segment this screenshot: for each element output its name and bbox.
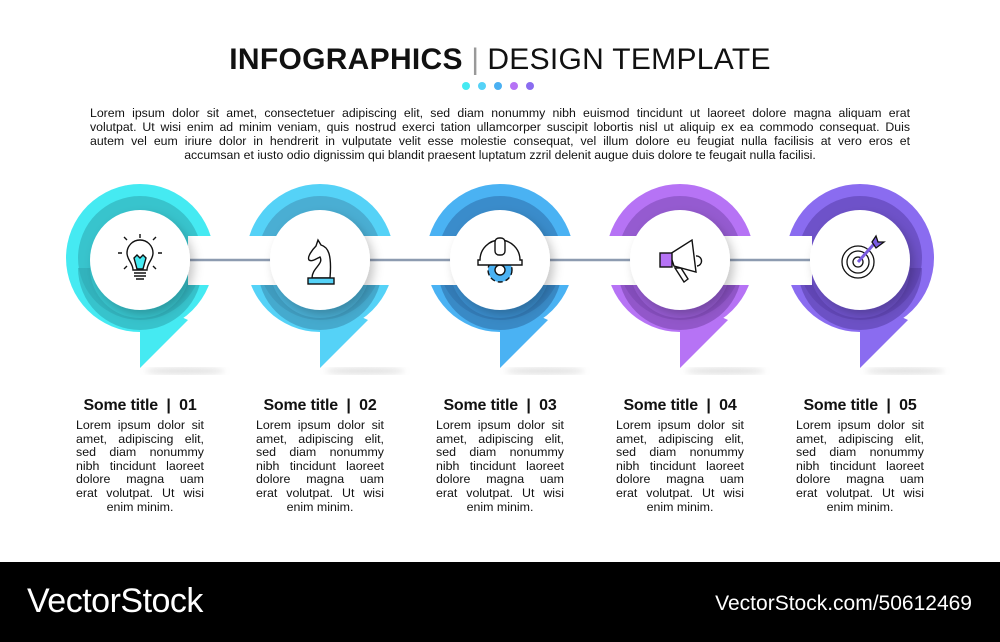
- column 4 text: nibh tincidunt laoreet: [616, 459, 744, 473]
- column 2 text: amet, adipiscing elit,: [256, 432, 384, 446]
- column 4 text: erat volutpat. Ut wisi: [616, 486, 744, 500]
- column 2 text: nibh tincidunt laoreet: [256, 459, 384, 473]
- column 1 text: enim minim.: [107, 500, 173, 514]
- marker 4: [606, 184, 754, 368]
- icon: chess knight: [308, 240, 334, 284]
- column 2 text: enim minim.: [287, 500, 353, 514]
- column 5 text: amet, adipiscing elit,: [796, 432, 924, 446]
- icon: light bulb: [118, 234, 162, 279]
- column 1 text: amet, adipiscing elit,: [76, 432, 204, 446]
- column 3 text: erat volutpat. Ut wisi: [436, 486, 564, 500]
- column 1 text: Some title | 01: [83, 397, 197, 414]
- column 1 text: erat volutpat. Ut wisi: [76, 486, 204, 500]
- white circles: [90, 210, 910, 310]
- title: INFOGRAPHICS | DESIGN TEMPLATE: [229, 43, 771, 76]
- white band: [188, 236, 812, 285]
- column 2 text: Some title | 02: [263, 397, 377, 414]
- column 5 text: Lorem ipsum dolor sit: [796, 418, 924, 432]
- icon: target: [842, 236, 884, 278]
- marker 2: [246, 184, 394, 368]
- column 3 text: sed diam nonummy: [436, 445, 564, 459]
- column 3 text: Lorem ipsum dolor sit: [436, 418, 564, 432]
- marker 1: [66, 184, 214, 368]
- column 3 text: Some title | 03: [443, 397, 557, 414]
- column 1 text: nibh tincidunt laoreet: [76, 459, 204, 473]
- footer bar: [0, 562, 1000, 642]
- tail shadows: [145, 368, 945, 374]
- connector line: [190, 259, 810, 261]
- column 5 text: enim minim.: [827, 500, 893, 514]
- column 4 text: Some title | 04: [623, 397, 737, 414]
- column 4 text: Lorem ipsum dolor sit: [616, 418, 744, 432]
- column 2 text: sed diam nonummy: [256, 445, 384, 459]
- markers diagram: [66, 184, 942, 375]
- intro text: Lorem ipsum dolor sit amet, consectetuer adipiscing elit, sed diam nonummy nibh euismod tincidunt ut laoreet dolore magna aliquam erat: [90, 106, 910, 120]
- column 5 text: dolore magna uam: [796, 472, 924, 486]
- icon: helmet gear: [478, 238, 522, 282]
- column 5 text: sed diam nonummy: [796, 445, 924, 459]
- column 4 text: sed diam nonummy: [616, 445, 744, 459]
- column 2 text: [256, 397, 384, 514]
- column 5 text: Some title | 05: [803, 397, 917, 414]
- icon: megaphone: [660, 240, 702, 282]
- column 5 text: erat volutpat. Ut wisi: [796, 486, 924, 500]
- column 1 text: Lorem ipsum dolor sit: [76, 418, 204, 432]
- title dots: [462, 82, 534, 90]
- marker 3: [426, 184, 574, 368]
- intro text: autem vel eum iriure dolor in hendrerit in vulputate velit esse molestie consequat, vel illum dolore eu feugiat nulla facilisis at vero eros et: [90, 134, 910, 148]
- column 4 text: [616, 397, 744, 514]
- column 4 text: amet, adipiscing elit,: [616, 432, 744, 446]
- intro text: accumsan et iusto odio dignissim qui blandit praesent luptatum zzril delenit augue duis dolore te feugait nulla facilisi.: [184, 148, 816, 162]
- column 1 text: sed diam nonummy: [76, 445, 204, 459]
- column 3 text: enim minim.: [467, 500, 533, 514]
- column 3 text: nibh tincidunt laoreet: [436, 459, 564, 473]
- intro text: [90, 106, 910, 162]
- column 2 text: dolore magna uam: [256, 472, 384, 486]
- footer logo: VectorStock: [27, 582, 203, 620]
- column 5 text: [796, 397, 924, 514]
- intro text: volutpat. Ut wisi enim ad minim veniam, quis nostrud exerci tation ullamcorper suscipit lobortis nisl ut aliquip ex ea commodo consequat. Duis: [90, 120, 910, 134]
- column 2 text: erat volutpat. Ut wisi: [256, 486, 384, 500]
- footer id: VectorStock.com/50612469: [715, 592, 972, 615]
- column 4 text: dolore magna uam: [616, 472, 744, 486]
- column 3 text: dolore magna uam: [436, 472, 564, 486]
- column 1 text: [76, 397, 204, 514]
- column 4 text: enim minim.: [647, 500, 713, 514]
- column 1 text: dolore magna uam: [76, 472, 204, 486]
- column 3 text: amet, adipiscing elit,: [436, 432, 564, 446]
- column 3 text: [436, 397, 564, 514]
- marker 5: [786, 184, 934, 368]
- column 2 text: Lorem ipsum dolor sit: [256, 418, 384, 432]
- column 5 text: nibh tincidunt laoreet: [796, 459, 924, 473]
